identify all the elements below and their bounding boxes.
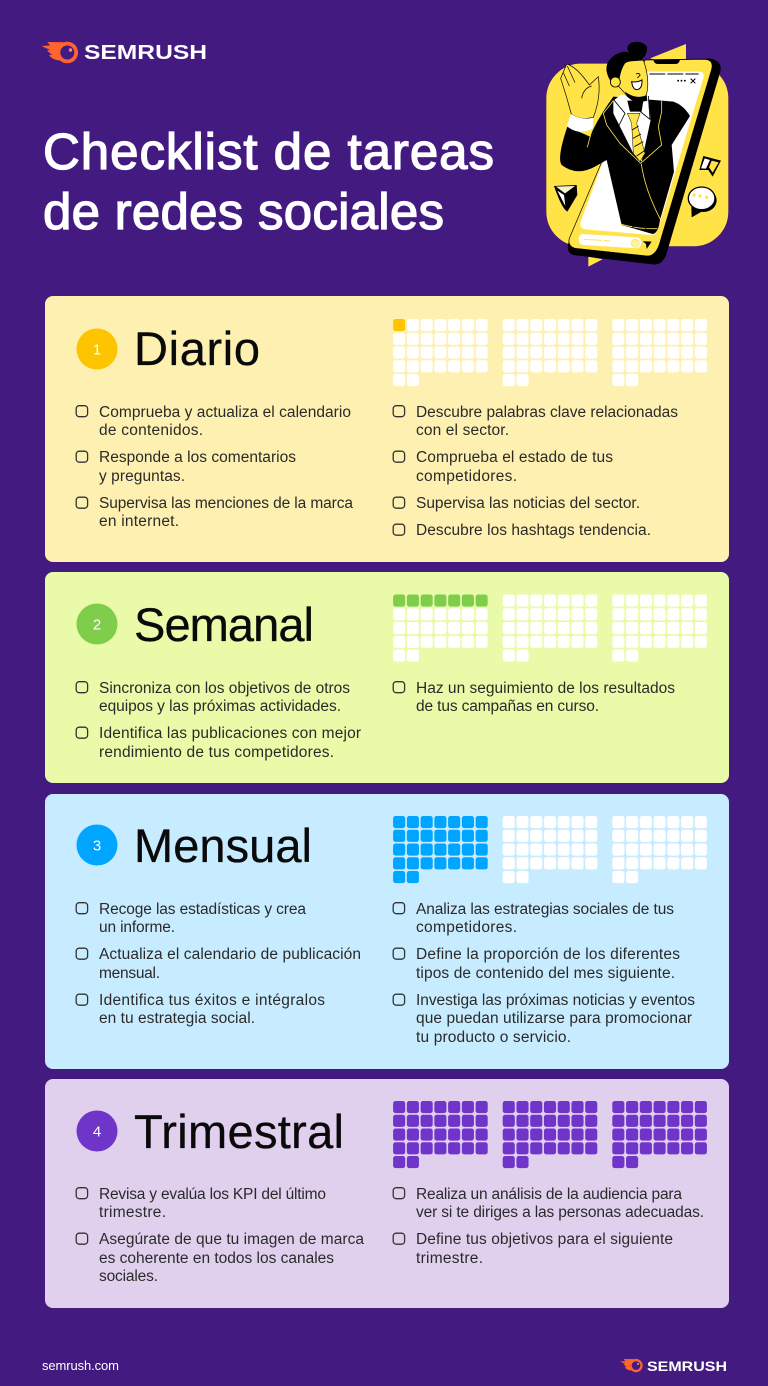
checklist: right column: tu producto o servicio. <box>416 1029 571 1046</box>
checklist: right column: Define la proporción de los diferentes <box>416 946 680 963</box>
calendar: one month highlighted <box>393 816 707 883</box>
checklist: left column <box>76 680 361 761</box>
checklist: left column: mensual. <box>99 965 160 982</box>
badge 3: 3 <box>93 838 101 854</box>
checklist: right column: trimestre. <box>416 1250 483 1267</box>
title: de redes sociales <box>43 183 444 240</box>
title: Checklist de tareas <box>43 123 494 180</box>
checklist: left column: Revisa y evalúa los KPI del último <box>99 1186 326 1203</box>
checklist: right column: Comprueba el estado de tus <box>416 449 613 466</box>
calendar: three months highlighted <box>393 1101 707 1168</box>
badge 1: 1 <box>93 342 101 358</box>
checklist: left column: es coherente en todos los canales <box>99 1250 334 1267</box>
checklist: left column: un informe. <box>99 919 175 936</box>
checklist: right column <box>393 901 695 1046</box>
title <box>43 123 494 240</box>
checklist: left column <box>76 901 361 1027</box>
logo: Semrush header: SEMRUSH <box>84 41 207 64</box>
checklist: left column: Supervisa las menciones de la marca <box>99 495 353 512</box>
heading: Diario: Diario <box>134 322 260 375</box>
checklist: left column: Comprueba y actualiza el calendario <box>99 404 351 421</box>
checklist: left column: Identifica tus éxitos e intégralos <box>99 992 325 1009</box>
heading: Trimestral: Trimestral <box>134 1105 344 1158</box>
checklist: left column: Asegúrate de que tu imagen de marca <box>99 1231 364 1248</box>
panel: Diario <box>45 296 729 562</box>
checklist: left column: trimestre. <box>99 1204 166 1221</box>
checklist: right column: Supervisa las noticias del sector. <box>416 495 640 512</box>
checklist: right column: Descubre palabras clave relacionadas <box>416 404 678 421</box>
badge 4: 4 <box>93 1124 101 1140</box>
badge 3 <box>76 824 118 866</box>
badge 4 <box>76 1110 118 1152</box>
checklist: right column: Analiza las estrategias sociales de tus <box>416 901 674 918</box>
checklist: right column: competidores. <box>416 468 517 485</box>
checklist: right column: tipos de contenido del mes siguiente. <box>416 965 675 982</box>
checklist: left column <box>76 404 353 530</box>
checklist: right column: Investiga las próximas noticias y eventos <box>416 992 695 1009</box>
footer: website: semrush.com <box>42 1358 119 1373</box>
checklist: right column: competidores. <box>416 919 517 936</box>
badge 1 <box>76 328 118 370</box>
checklist: right column: Define tus objetivos para el siguiente <box>416 1231 673 1248</box>
checklist: left column: rendimiento de tus competidores. <box>99 744 334 761</box>
checklist: right column: Realiza un análisis de la audiencia para <box>416 1186 682 1203</box>
checklist: right column: de tus campañas en curso. <box>416 698 599 715</box>
panel: Semanal <box>45 572 729 783</box>
logo: Semrush footer: SEMRUSH <box>647 1358 727 1374</box>
checklist: left column: Actualiza el calendario de publicación <box>99 946 361 963</box>
calendar: one week highlighted <box>393 594 707 662</box>
heading: Semanal: Semanal <box>134 598 314 651</box>
checklist: right column: con el sector. <box>416 422 509 439</box>
checklist: right column <box>393 680 675 715</box>
checklist: right column: ver si te diriges a las personas adecuadas. <box>416 1204 704 1221</box>
badge 2: 2 <box>93 616 101 634</box>
checklist: left column: Sincroniza con los objetivos de otros <box>99 680 350 697</box>
checklist: left column: en internet. <box>99 513 179 530</box>
checklist: left column: y preguntas. <box>99 468 185 485</box>
checklist: left column: Responde a los comentarios <box>99 449 296 466</box>
logo: Semrush header <box>42 41 207 64</box>
panel: Mensual <box>45 794 729 1069</box>
checklist: left column: Recoge las estadísticas y crea <box>99 901 306 918</box>
checklist: left column: en tu estrategia social. <box>99 1010 255 1027</box>
badge 2 <box>76 604 118 644</box>
logo: Semrush footer <box>620 1358 727 1374</box>
checklist: left column: de contenidos. <box>99 422 203 439</box>
checklist: right column: que puedan utilizarse para promocionar <box>416 1010 692 1027</box>
calendar: one day highlighted <box>393 319 707 386</box>
checklist: left column: equipos y las próximas actividades. <box>99 698 341 715</box>
illustration: man waving from smartphone <box>546 42 729 267</box>
checklist: right column: Haz un seguimiento de los resultados <box>416 680 675 697</box>
checklist: right column: Descubre los hashtags tendencia. <box>416 522 651 539</box>
panel: Trimestral <box>45 1079 729 1308</box>
checklist: right column <box>393 1186 704 1267</box>
heading: Mensual: Mensual <box>134 819 312 872</box>
checklist: left column <box>76 1186 364 1285</box>
checklist: left column: Identifica las publicaciones con mejor <box>99 725 361 742</box>
checklist: left column: sociales. <box>99 1268 158 1285</box>
checklist: right column <box>393 404 678 539</box>
